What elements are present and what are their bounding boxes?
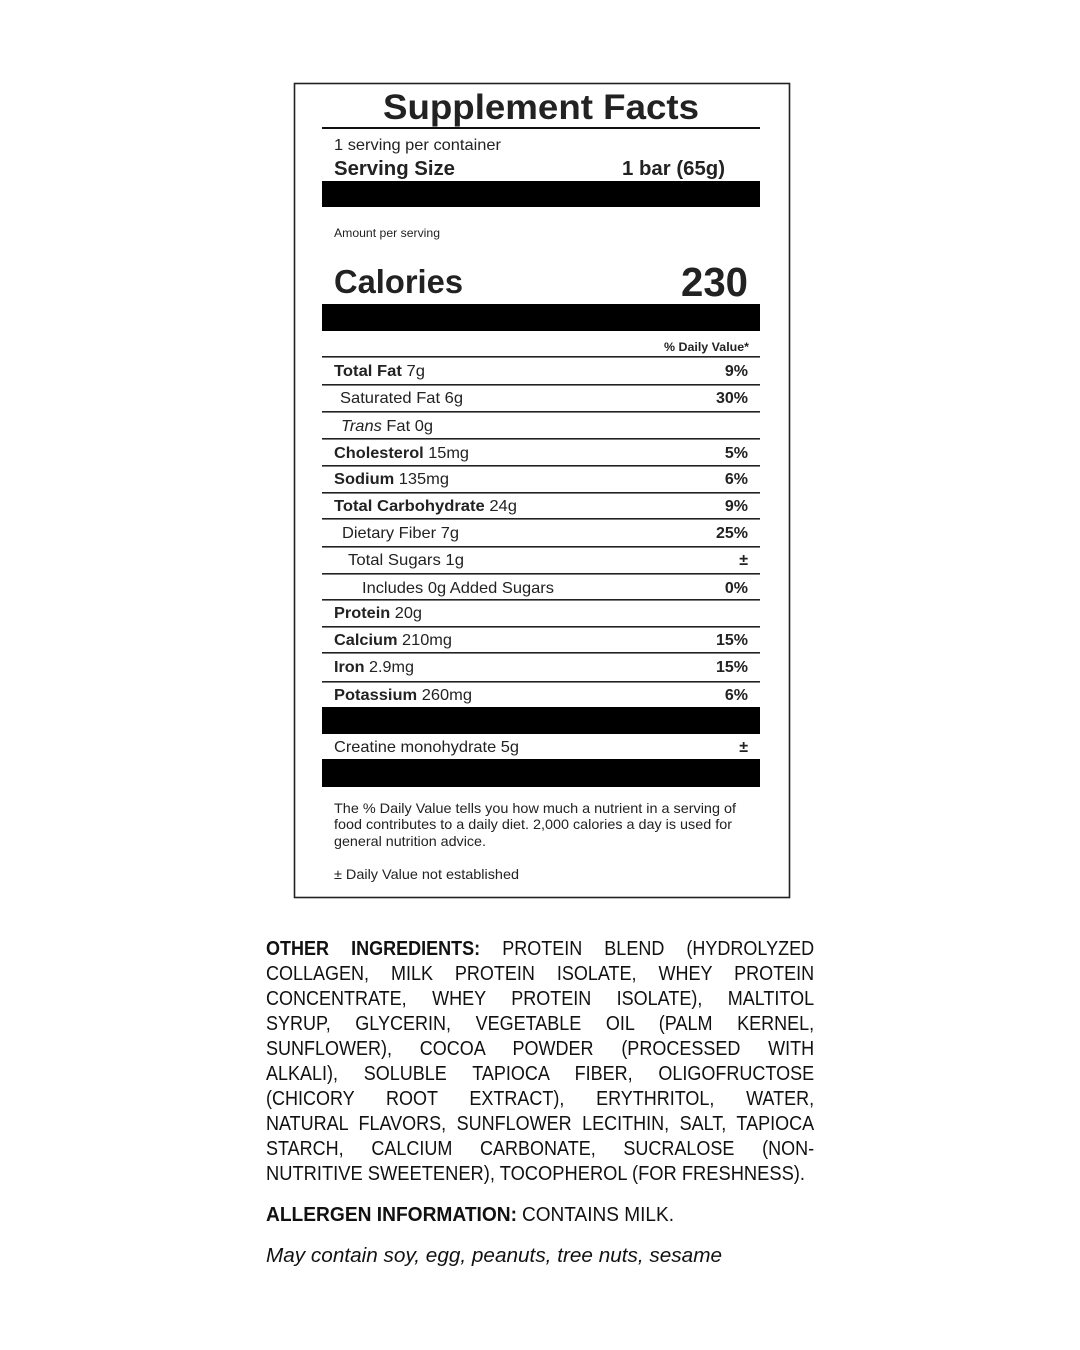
row: added sugars: 0% <box>725 580 748 597</box>
row: total fat: Total Fat 7g <box>334 363 425 380</box>
serving information <box>334 137 725 180</box>
row: total fat: 9% <box>725 363 748 380</box>
row: creatine <box>334 739 748 756</box>
serving information: 1 bar (65g) <box>622 158 725 180</box>
row: iron: Iron 2.9mg <box>334 659 414 676</box>
daily value header: % Daily Value* <box>664 342 750 354</box>
allergen information: ALLERGEN INFORMATION: <box>266 1204 517 1226</box>
other ingredients text block: NATURAL FLAVORS, SUNFLOWER LECITHIN, SALT, TAPIOCA <box>266 1113 814 1135</box>
daily value footnote: food contributes to a daily diet. 2,000 calories a day is used for <box>334 816 732 832</box>
row: total sugars <box>348 552 748 569</box>
other ingredients text block: SUNFLOWER), COCOA POWDER (PROCESSED WITH <box>266 1038 814 1060</box>
other ingredients text block: (CHICORY ROOT EXTRACT), ERYTHRITOL, WATER, <box>266 1088 814 1110</box>
calories row <box>334 259 748 305</box>
other ingredients text block <box>266 938 814 1160</box>
daily value footnote <box>334 800 736 849</box>
row: potassium <box>334 687 748 704</box>
daily value not established note: ± Daily Value not established <box>334 866 519 882</box>
amount per serving label: Amount per serving <box>334 226 440 240</box>
row: dietary fiber: 25% <box>716 525 748 542</box>
row: calcium: 15% <box>716 632 748 649</box>
other ingredients text block: OTHER INGREDIENTS: PROTEIN BLEND (HYDROLYZED <box>266 938 814 960</box>
row: saturated fat <box>340 390 748 407</box>
calories row: Calories <box>334 263 463 300</box>
other ingredients text block: CONCENTRATE, WHEY PROTEIN ISOLATE), MALTITOL <box>266 988 814 1010</box>
row: creatine: Creatine monohydrate 5g <box>334 739 519 756</box>
row: calcium: Calcium 210mg <box>334 632 452 649</box>
row: saturated fat: 30% <box>716 390 748 407</box>
row: total carbohydrate: 9% <box>725 498 748 515</box>
row: cholesterol <box>334 445 748 462</box>
serving information: Serving Size <box>334 158 455 180</box>
row: cholesterol: Cholesterol 15mg <box>334 445 469 462</box>
row: calcium <box>334 632 748 649</box>
row: protein: Protein 20g <box>334 605 422 622</box>
row: dietary fiber: Dietary Fiber 7g <box>342 525 459 542</box>
calories row: 230 <box>681 259 748 305</box>
serving information: 1 serving per container <box>334 137 502 154</box>
other ingredients text block: SYRUP, GLYCERIN, VEGETABLE OIL (PALM KERNEL, <box>266 1013 814 1035</box>
row: trans fat: Trans Fat 0g <box>341 418 433 435</box>
daily value footnote: The % Daily Value tells you how much a nutrient in a serving of <box>334 800 736 816</box>
row: sodium: 6% <box>725 471 748 488</box>
row: potassium: 6% <box>725 687 748 704</box>
row: cholesterol: 5% <box>725 445 748 462</box>
row: total sugars: ± <box>739 552 748 569</box>
row: creatine: ± <box>739 739 748 756</box>
row: sodium: Sodium 135mg <box>334 471 449 488</box>
allergen advisory: May contain soy, egg, peanuts, tree nuts, sesame <box>266 1244 722 1267</box>
nutrient rows <box>334 363 748 704</box>
row: total sugars: Total Sugars 1g <box>348 552 464 569</box>
row: iron: 15% <box>716 659 748 676</box>
row: total fat <box>334 363 748 380</box>
other ingredients text block: STARCH, CALCIUM CARBONATE, SUCRALOSE (NON- <box>266 1138 814 1160</box>
row: added sugars: Includes 0g Added Sugars <box>362 580 554 597</box>
row: potassium: Potassium 260mg <box>334 687 472 704</box>
other ingredients text block: ALKALI), SOLUBLE TAPIOCA FIBER, OLIGOFRUCTOSE <box>266 1063 814 1085</box>
daily value footnote: general nutrition advice. <box>334 833 486 849</box>
row: sodium <box>334 471 748 488</box>
row: saturated fat: Saturated Fat 6g <box>340 390 463 407</box>
allergen information: CONTAINS MILK. <box>522 1204 674 1226</box>
title: Supplement Facts <box>383 88 699 127</box>
row: total carbohydrate <box>334 498 748 515</box>
row: iron <box>334 659 748 676</box>
allergen information <box>266 1204 674 1226</box>
row: dietary fiber <box>342 525 748 542</box>
other ingredients text block: COLLAGEN, MILK PROTEIN ISOLATE, WHEY PROTEIN <box>266 963 814 985</box>
last ingredients line: NUTRITIVE SWEETENER), TOCOPHEROL (FOR FRESHNESS). <box>266 1163 805 1185</box>
row: added sugars <box>362 580 748 597</box>
row: total carbohydrate: Total Carbohydrate 24g <box>334 498 517 515</box>
